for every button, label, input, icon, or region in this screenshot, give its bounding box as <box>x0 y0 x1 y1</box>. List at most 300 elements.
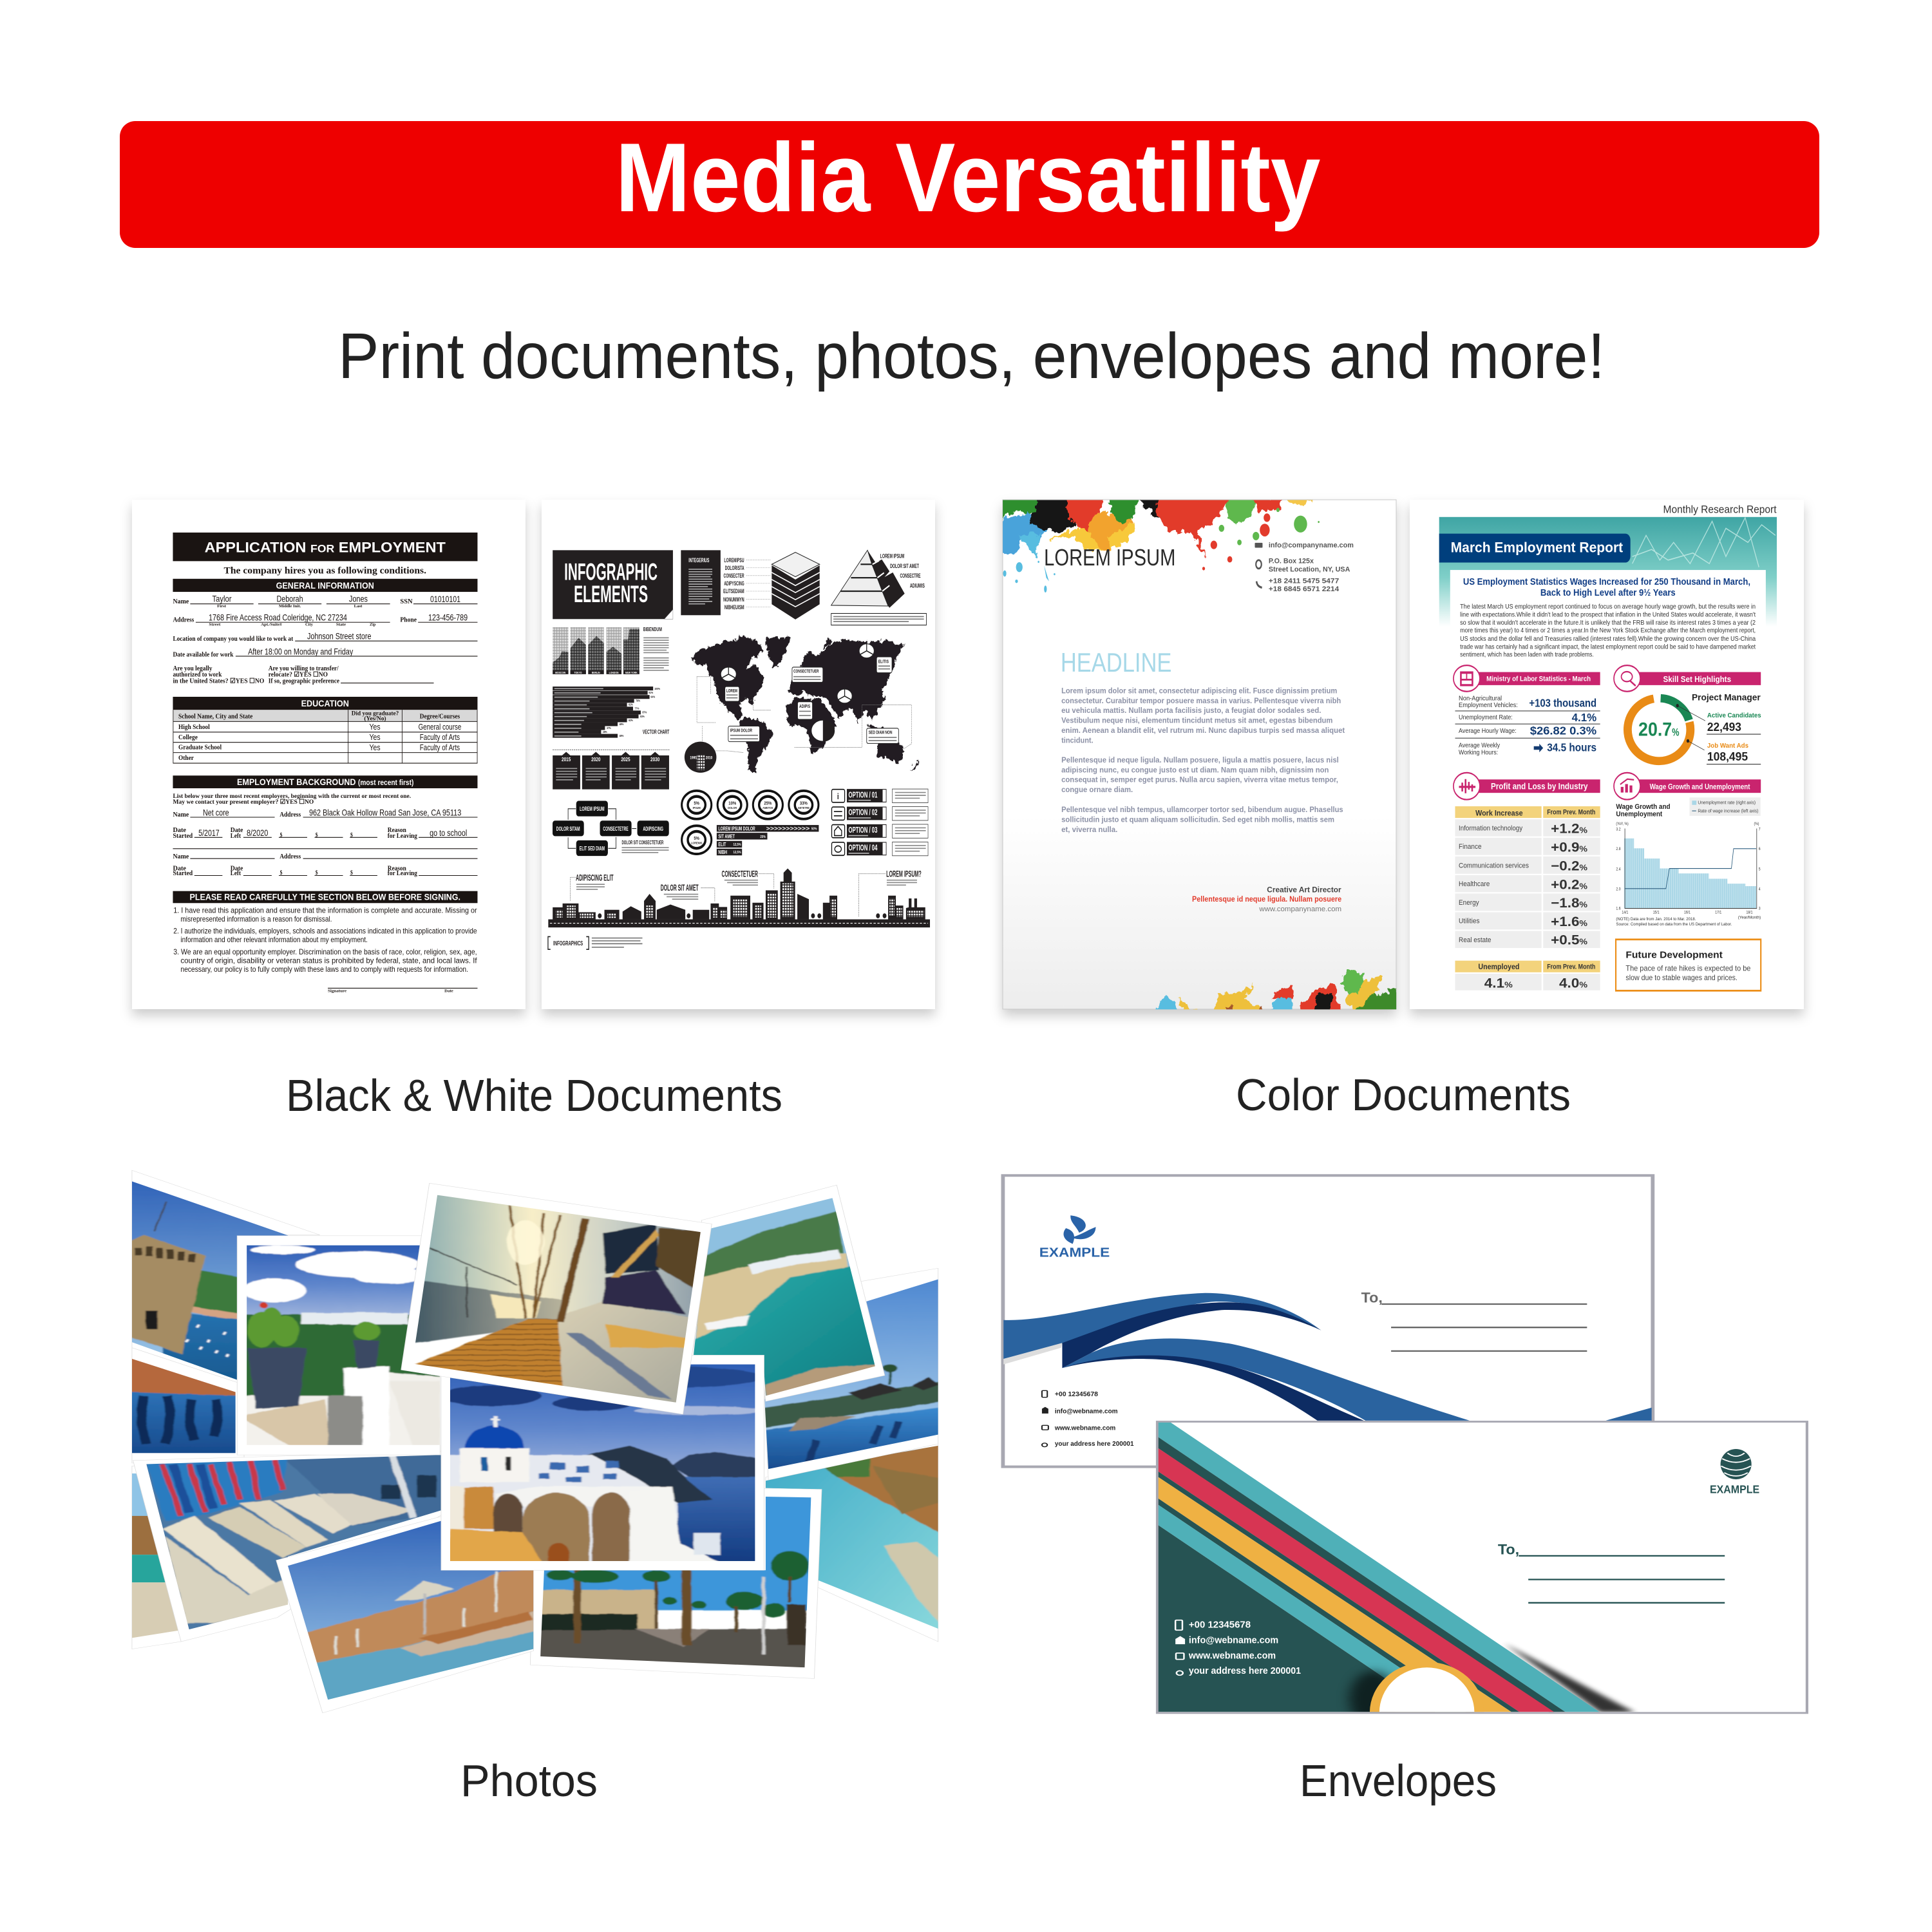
stacked layers diagram: DOLORISTA <box>725 564 744 571</box>
flow diagram: ELIT SED DIAM <box>580 845 605 852</box>
percent rings <box>682 791 819 854</box>
panel: black and white form document: 1. I have read this application and ensure that the information is complete and accurate. Missing or <box>173 907 477 915</box>
panel: black and white form document: Middle Init. <box>279 605 301 609</box>
section: skill set highlights: 108,495 <box>1707 750 1748 764</box>
top paint splash <box>1000 497 1320 592</box>
section: skill set highlights: Job Want Ads <box>1707 742 1748 749</box>
percent labels: GETETRE <box>798 806 810 810</box>
progress bars: 25% <box>760 835 766 839</box>
body text: consequat in, semper eget purus. Nulla arcu sapien, viverra vitae metus tempor, <box>1061 777 1338 784</box>
stacked layers diagram: NIBHEUISM <box>724 603 744 611</box>
body text: sollicitudin justo et quam aliquam sollicitudin. Sed eget nibh mollis, mattis sem <box>1061 817 1334 824</box>
panel: black and white form document: General course <box>419 723 461 732</box>
signature block: Pellentesque id neque ligula. Nullam posuere <box>1192 896 1341 904</box>
title banner <box>120 121 1819 248</box>
photo: tower <box>128 1170 320 1385</box>
dotted city bar chart <box>553 626 669 674</box>
panel: black and white form document: misrepresented information is a reason for dismissal. <box>180 916 332 923</box>
panel: black and white form document: Reason <box>388 827 407 834</box>
signature block: Creative Art Director <box>1267 886 1341 895</box>
panel: black and white form document: School Name, City and State <box>178 714 252 721</box>
panel: black and white form document: Other <box>178 755 194 762</box>
contact details: Street Location, NY, USA <box>1269 565 1350 574</box>
world map: CONSECTETUER <box>793 669 819 674</box>
panel: black and white form document: State <box>336 623 346 627</box>
option list: OPTION / 03 <box>849 826 878 835</box>
horizontal bar chart: 91% <box>649 691 654 694</box>
report headline: Back to High Level after 9½ Years <box>1540 587 1676 598</box>
section: skill set highlights: 22,493 <box>1707 720 1741 734</box>
section: wage growth chart: 5 <box>1759 867 1761 872</box>
horizontal bar chart: 28% <box>603 730 607 734</box>
panel: black and white form document: for Leaving <box>388 833 417 840</box>
section: wage growth chart: Wage Growth and Unemployment <box>1650 784 1750 791</box>
body text: Pellentesque vel nibh tempus, ullamcorper tortor sed, bibendum augue. Phasellus <box>1061 806 1343 814</box>
contact details: info@companyname.com <box>1269 542 1354 549</box>
text block: integerius <box>681 550 721 615</box>
report intro: US stocks and the dollar fell and Treasuries rallied (interest rates fell).While the growing concern over the US-China <box>1460 635 1756 642</box>
horizontal bar chart: 48% <box>620 722 624 726</box>
panel: black and white form document: Location of company you would like to work at <box>173 635 294 643</box>
panel: black and white form document: APPLICATION FOR EMPLOYMENT <box>205 540 446 556</box>
world map: 2010 <box>706 756 712 761</box>
section: profit and loss table: −1.8 % <box>1551 895 1588 910</box>
photo: loungers <box>133 1451 442 1642</box>
report intro: line with expectations.While it didn't lead to the prospect that inflation in the United States would accelerate, it wasn't <box>1460 611 1756 618</box>
panel: black and white form document: 5/2017 <box>198 828 220 838</box>
timeline: 2030 <box>650 756 659 762</box>
flow diagram: LOREM IPSUM <box>580 805 605 812</box>
panel: black and white form document: May we contact your present employer? ☑YES ☐NO <box>173 798 314 805</box>
section: wage growth chart: 2.4 <box>1616 867 1621 872</box>
panel: black and white form document: The company hires you as following conditions. <box>224 565 426 576</box>
progress bars <box>717 824 819 855</box>
contact details: P.O. Box 125x <box>1269 558 1314 565</box>
text block: integerius: INTEGERIUS <box>688 556 710 564</box>
section: profit and loss table: Communication services <box>1459 862 1529 870</box>
panel: black and white form document: 01010101 <box>430 594 460 604</box>
panel: black and white form document: Name <box>173 811 189 819</box>
body text: consectetur. Curabitur tempor posuere massa in varius. Pellentesque viverra nibh <box>1061 697 1341 705</box>
panel: black and white form document: relocate? ☑YES ☐NO <box>269 672 328 679</box>
contact details <box>1042 1390 1134 1447</box>
blue wave shapes <box>1003 1293 1652 1421</box>
pyramid diagram: ADIUMIS <box>910 582 925 589</box>
contact details <box>1255 542 1354 593</box>
percent labels: 33% <box>800 801 808 806</box>
panel: black and white form document: Street <box>209 623 221 627</box>
contact details: www.webname.com <box>1188 1651 1276 1661</box>
flow diagram: DOLOR SIT CONSECTETUER <box>621 839 664 846</box>
section: ministry statistics: 34.5 hours <box>1547 742 1596 754</box>
percent labels <box>691 801 810 845</box>
percent labels: 10% <box>728 801 736 806</box>
panel: black and white form document: Net core <box>203 807 229 818</box>
panel: black and white form document: Phone <box>400 616 417 624</box>
photo: beach <box>683 1185 891 1407</box>
photo collage <box>128 1170 945 1713</box>
dotted city bar chart: LONDON <box>609 670 619 674</box>
percent labels: IPSUM <box>693 806 701 810</box>
label: black and white documents: Black & White Documents <box>286 1070 782 1121</box>
section: wage growth chart: 14/1 <box>1622 911 1628 915</box>
section: wage growth chart: (Year/Month) <box>1738 916 1761 920</box>
panel: black and white form document: Name <box>173 853 189 861</box>
section: wage growth chart: Wage Growth and <box>1616 803 1671 811</box>
section: skill set highlights: Active Candidates <box>1707 712 1761 719</box>
section: profit and loss table: Utilities <box>1459 918 1480 925</box>
panel: black and white form document: Johnson Street store <box>307 630 372 641</box>
panel: black and white form document: Yes <box>370 723 381 732</box>
body text: adipiscing nunc, eu congue justo est ut diam. Nam quam nibh, dignissim non <box>1061 766 1329 775</box>
photo: palm street <box>530 1488 822 1678</box>
panel: black and white form document: Left <box>231 833 242 840</box>
panel: black and white form document: Started <box>173 870 193 877</box>
percent labels: AMETOS <box>762 806 773 810</box>
section: ministry statistics: Ministry of Labor Statistics - March <box>1486 675 1591 683</box>
section: profit and loss table: Information technology <box>1459 824 1522 833</box>
body text: eu vehicula mattis. Nullam porta facilisis justo, a feugiat dolor sodales sed. <box>1061 707 1321 715</box>
percent labels: LOREMIS <box>691 841 702 845</box>
report intro: The latest March US employment report continued to focus on average hourly wage growth, but the results were in <box>1460 603 1756 610</box>
label: photos: Photos <box>460 1756 598 1806</box>
stacked layers diagram: LOREMIPSU <box>724 556 744 564</box>
panel: black and white form document: College <box>178 734 198 741</box>
headline: HEADLINE <box>1061 647 1171 677</box>
world map: LOREM <box>726 688 737 694</box>
section: wage growth chart: 3.2 <box>1616 828 1621 832</box>
panel: black and white form document: $ <box>316 831 318 838</box>
section: profit and loss table: +0.9 % <box>1551 840 1588 855</box>
section: skill set highlights: % <box>1672 727 1680 739</box>
contact details: info@webname.com <box>1189 1634 1278 1645</box>
panel: black and white form document: Zip <box>370 623 375 627</box>
section: skill set highlights: Project Manager <box>1692 692 1761 703</box>
world map: SED DIAM NON <box>869 730 893 735</box>
contact details: your address here 200001 <box>1189 1665 1301 1676</box>
contact details: +18 2411 5475 5477 <box>1269 577 1340 585</box>
green globe logo <box>1710 1449 1759 1495</box>
label: envelopes: Envelopes <box>1300 1756 1497 1806</box>
horizontal bar chart: 62% <box>629 703 633 706</box>
flow diagram: CONSECTETRE <box>603 825 629 832</box>
progress bars: SIT AMET <box>718 833 735 840</box>
panel: black and white form document: $ <box>316 869 318 876</box>
flow diagram <box>553 801 669 856</box>
report intro: trade war has certainly had a significant impact, the latest employment report could be said to have dampened market <box>1460 643 1756 650</box>
world map: ELITIS <box>878 659 889 665</box>
panel: color letterhead document <box>1000 497 1402 1016</box>
body text: congue ornare diam. <box>1061 786 1133 794</box>
panel: black and white form document: First <box>217 605 226 609</box>
stacked layers diagram: ADIPYSCING <box>724 580 744 587</box>
section: wage growth chart: (YoY, %) <box>1616 822 1629 826</box>
report intro: sentiment, which has been laden with trade problems. <box>1460 651 1594 658</box>
panel: black and white form document: Signature <box>328 989 347 994</box>
flow diagram: DOLOR SITAM <box>556 825 580 832</box>
teal header: March Employment Report <box>1451 540 1624 556</box>
section: profit and loss table: Unemployed <box>1478 963 1519 971</box>
contact details <box>1175 1619 1301 1676</box>
section: profit and loss table: +0.5 % <box>1551 933 1588 947</box>
progress bars: LOREM IPSUM DOLOR <box>718 825 755 832</box>
panel: black and white form document: SSN <box>400 598 413 606</box>
panel: black and white form document: $ <box>350 831 353 838</box>
report title tab <box>1439 534 1631 563</box>
city skyline: LOREM IPSUM? <box>886 868 922 879</box>
section: profit and loss table: From Prev. Month <box>1547 809 1595 817</box>
horizontal bar chart <box>553 687 670 738</box>
pyramid diagram: LOREM IPSUM <box>880 552 904 560</box>
section: wage growth chart: 1.6 <box>1616 907 1621 911</box>
horizontal bar chart: 94% <box>650 695 656 699</box>
panel: black and white form document: Left <box>231 870 242 877</box>
callout: future development: The pace of rate hikes is expected to be <box>1625 965 1751 973</box>
panel: black and white form document: for Leaving <box>388 870 417 877</box>
label: color documents: Color Documents <box>1236 1070 1571 1120</box>
photo: santorini <box>440 1355 764 1570</box>
panel: black and white form document: Jones <box>349 593 368 604</box>
panel: black and white form document: Did you graduate? <box>352 710 399 717</box>
section: wage growth chart: 18/1 <box>1747 911 1753 915</box>
contact details: +18 6845 6571 2214 <box>1269 585 1340 593</box>
section: wage growth chart: 3 <box>1759 907 1761 911</box>
infographics footer: INFOGRAPHICS <box>553 940 583 947</box>
section: profit and loss table: +1.6 % <box>1551 914 1588 929</box>
section: profit and loss table: Real estate <box>1459 936 1492 945</box>
stacked layers diagram: ELITSEDIAM <box>723 587 744 594</box>
heading block: INFOGRAPHIC <box>564 559 658 585</box>
bottom paint splash <box>1155 969 1396 1010</box>
panel: black and white form document: $ <box>350 869 353 876</box>
horizontal bar chart: 37% <box>607 726 611 730</box>
panel: black and white form document: 962 Black Oak Hollow Road San Jose, CA 95113 <box>309 807 461 818</box>
panel: black and white form document: GENERAL INFORMATION <box>276 580 374 591</box>
panel: black and white form document: in the United States? ☑YES ☐NO <box>173 678 264 685</box>
section: wage growth chart: 17/1 <box>1715 911 1721 915</box>
panel: black and white form document: City <box>305 623 313 627</box>
progress bars: NIBH <box>718 849 727 855</box>
progress bars: ELIT <box>718 841 726 848</box>
timeline <box>553 750 669 790</box>
panel: black and white form document: necessary, our policy is to fully comply with these laws and to comply with requests for information. <box>180 966 468 974</box>
stacked layers diagram: NONUMMYN <box>723 596 744 603</box>
section: profit and loss table: −0.2 % <box>1551 858 1588 873</box>
body text: Pellentesque id neque ligula. Nullam posuere, ligula a mattis posuere, lacus nisl <box>1061 757 1339 764</box>
address lines <box>1361 1290 1587 1351</box>
section: profit and loss table: 4.0 % <box>1559 975 1588 990</box>
panel: black and white form document: Taylor <box>213 593 232 604</box>
panel: black and white form document: Date <box>231 865 243 873</box>
panel: black and white form document <box>132 500 526 1009</box>
heading block: ELEMENTS <box>574 582 648 608</box>
section: ministry statistics: Employment Vehicles: <box>1459 701 1518 708</box>
option list: OPTION / 02 <box>849 808 878 817</box>
percent labels: 5% <box>694 801 699 806</box>
panel: black and white form document: Date <box>173 865 186 873</box>
section: wage growth chart: Unemployment <box>1616 810 1663 819</box>
panel: black and white form document: After 18:00 on Monday and Friday <box>248 646 354 657</box>
panel: black and white form document: Degree/Courses <box>420 714 460 721</box>
panel: black and white form document: (Yes/No) <box>364 715 386 722</box>
address lines: To, <box>1361 1290 1383 1306</box>
panel: black and white form document: Address <box>279 853 301 861</box>
percent labels: DOLOR <box>728 806 737 810</box>
section: skill set highlights: 20.7 <box>1638 719 1672 740</box>
section: wage growth chart: (NOTE) Data are from Jan. 2014 to Mar. 2018. <box>1616 918 1696 922</box>
section: ministry statistics: Working Hours: <box>1459 748 1498 756</box>
panel: black and white form document: Date <box>173 827 186 834</box>
panel: black and white form document: 1768 Fire Access Road Coleridge, NC 27234 <box>209 612 347 623</box>
section: wage growth chart: 2.8 <box>1616 848 1621 851</box>
panel: black and white form document: Are you legally <box>173 665 213 672</box>
horizontal bar chart: 87% <box>643 710 647 714</box>
section: wage growth chart <box>1614 773 1761 927</box>
photo: balcony <box>237 1236 446 1455</box>
report label: Monthly Research Report <box>1663 504 1777 516</box>
envelope: blue wave <box>1003 1175 1653 1467</box>
teal header <box>1439 517 1777 663</box>
title: Media Versatility <box>616 123 1320 232</box>
section: ministry statistics <box>1454 665 1600 756</box>
progress bars: >>>>>>>>>>> <box>766 824 810 832</box>
panel: black and white form document: 2. I authorize the individuals, employers, schools and associations indicated in this application to provide <box>173 928 477 936</box>
donut chart <box>1621 692 1697 768</box>
pyramid diagram: DOLOR SIT AMET <box>890 562 919 569</box>
section: wage growth chart: Source: Compiled based on data from the US Department of Labor. <box>1616 922 1732 927</box>
flow diagram: ADIPISCING <box>643 825 663 832</box>
section: profit and loss table: Finance <box>1459 843 1482 851</box>
section: profit and loss table: +1.2 % <box>1551 821 1588 836</box>
world map: 1995 <box>690 756 697 761</box>
horizontal bar chart: 62% <box>629 718 633 722</box>
panel: black and white form document: information and other relevant information about my employment. <box>180 936 368 945</box>
city skyline: ADIPISCING ELIT <box>576 872 614 883</box>
section: profit and loss table: Work Increase <box>1475 809 1523 818</box>
section: ministry statistics: 4.1% <box>1572 712 1596 724</box>
section: skill set highlights <box>1614 665 1761 768</box>
photo: resort <box>276 1510 542 1713</box>
report headline <box>1463 576 1750 598</box>
address lines: To, <box>1498 1541 1519 1557</box>
panel: black and white form document: Are you willing to transfer/ <box>269 665 339 672</box>
panel: black and white form document: Faculty of Arts <box>420 744 460 752</box>
dotted city bar chart: TOKYO <box>574 670 582 674</box>
section: wage growth chart: Unemployment rate (right axis) <box>1698 800 1756 806</box>
progress bars: 50% <box>811 827 817 831</box>
panel: black and white form document: 123-456-789 <box>428 612 468 623</box>
option list: i <box>837 792 839 801</box>
horizontal bar chart: 78% <box>636 699 641 703</box>
callout: future development <box>1616 940 1761 990</box>
section: profit and loss table: Profit and Loss by Industry <box>1491 781 1588 791</box>
panel: black and white form document: If so, geographic preference <box>269 678 339 685</box>
panel: infographic elements document <box>542 500 935 1009</box>
panel: black and white form document: go to school <box>430 828 467 838</box>
dotted city bar chart: BERLIN <box>592 670 600 674</box>
panel: black and white form document: Address <box>279 811 301 819</box>
heading block <box>553 550 673 619</box>
contact details: info@webname.com <box>1055 1407 1118 1415</box>
option list <box>831 789 928 856</box>
panel: black and white form document: 3. We are an equal opportunity employer. Discrimination on the basis of race, color, religion, sex, age, <box>173 949 477 956</box>
contact details: www.webname.com <box>1054 1424 1115 1432</box>
section: profit and loss table: Healthcare <box>1459 880 1490 888</box>
panel: black and white form document: authorized to work <box>173 672 222 679</box>
panel: black and white form document: EMPLOYMENT BACKGROUND (most recent first) <box>237 777 413 787</box>
section: ministry statistics: Average Weekly <box>1459 741 1500 749</box>
panel: black and white form document: Name <box>173 598 189 606</box>
dotted city bar chart: BIBENDUM <box>643 626 662 632</box>
section: ministry statistics: $26.82 0.3% <box>1530 725 1596 737</box>
stacked layers diagram: CONSECTER <box>724 572 744 579</box>
subtitle: Print documents, photos, envelopes and more! <box>338 320 1605 392</box>
horizontal bar chart: 48% <box>620 734 624 737</box>
panel: black and white form document: Last <box>354 605 363 609</box>
callout: future development: slow due to stable wages and prices. <box>1625 974 1738 982</box>
section: wage growth chart: 16/1 <box>1684 911 1690 915</box>
option list: OPTION / 01 <box>849 790 878 800</box>
panel: black and white form document: Date <box>444 989 454 994</box>
panel: black and white form document: High School <box>178 724 210 731</box>
horizontal bar chart: VECTOR CHART <box>643 729 670 735</box>
section: wage growth chart: 7 <box>1759 828 1761 832</box>
percent labels: 5% <box>694 837 699 841</box>
timeline: 2015 <box>562 756 571 762</box>
option list: OPTION / 04 <box>849 843 878 853</box>
section: wage growth chart: Rate of wage increase (left axis) <box>1698 809 1758 814</box>
section: wage growth chart: 2.0 <box>1616 887 1621 892</box>
report intro: so slow that it wouldn't accelerate in the future.It is unlikely that the FRB will raise its interest rates 3 times a year (2 <box>1460 619 1756 626</box>
body text: enim. Aenean a blandit elit, vel rutrum mi. Nunc dapibus turpis sed massa aliquet <box>1061 727 1345 735</box>
timeline: 2020 <box>591 756 600 762</box>
panel: black and white form document: EDUCATION <box>301 697 349 708</box>
section: ministry statistics: Unemployment Rate: <box>1459 714 1513 721</box>
body text <box>1061 688 1345 834</box>
photo: right pool terrace <box>758 1268 945 1480</box>
panel: black and white form document: Date <box>231 827 243 834</box>
panel: black and white form document: $ <box>280 831 283 838</box>
callout: future development: Future Development <box>1625 949 1723 960</box>
panel: black and white form document: 8/2020 <box>247 828 268 838</box>
panel: black and white form document: $ <box>280 869 283 876</box>
section: wage growth chart: 6 <box>1759 848 1761 851</box>
horizontal bar chart: 77% <box>635 706 639 710</box>
body text: et, viverra nulla. <box>1061 826 1117 834</box>
horizontal bar chart: 83% <box>640 714 645 718</box>
blue logo <box>1039 1217 1110 1260</box>
panel: black and white form document: Apt./Suite# <box>261 623 282 627</box>
panel: black and white form document: country of origin, disability or veteran status is prohibited by federal, state, and local laws. If <box>180 958 477 965</box>
panel: black and white form document: Started <box>173 833 193 840</box>
world map: IPSUM DOLOR <box>730 728 752 734</box>
address lines <box>1498 1541 1725 1603</box>
photo: sailboat <box>401 1183 712 1414</box>
body text: Lorem ipsum dolor sit amet, consectetur adipiscing elit. Fusce dignissim pretium <box>1061 688 1337 696</box>
progress bars: 12,5% <box>734 842 741 847</box>
pyramid diagram <box>831 550 926 625</box>
photo: lower right pool <box>758 1440 945 1642</box>
panel: black and white form document: Reason <box>388 865 407 873</box>
horizontal bar chart: 100% <box>654 687 660 690</box>
company name: LOREM IPSUM <box>1044 545 1175 571</box>
section: profit and loss table: 4.1 % <box>1484 975 1513 990</box>
diagonal stripes <box>1159 1423 1635 1727</box>
infographics footer <box>548 936 643 949</box>
city skyline <box>548 868 930 927</box>
city skyline: DOLOR SIT AMET <box>661 882 699 893</box>
panel: black and white form document: Graduate School <box>178 744 222 752</box>
